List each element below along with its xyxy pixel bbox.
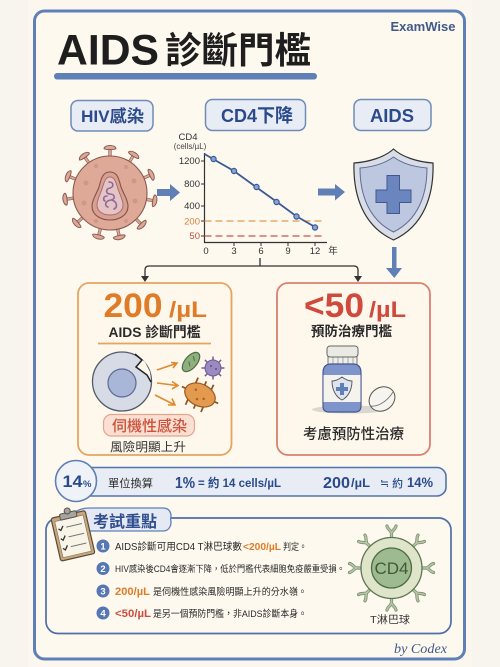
item 4: 是另一個預防門檻，非AIDS診斷本身。	[153, 608, 307, 620]
signature: by Codex	[394, 642, 448, 657]
title	[54, 26, 317, 80]
panel: <50/µL	[277, 283, 430, 455]
value <50/µL: <50	[304, 287, 364, 325]
chart: CD4 decline: 6	[258, 246, 264, 257]
chart: CD4 decline: 800	[184, 179, 200, 190]
panel: 200/µL	[78, 283, 232, 455]
icon: CD4 T cell: CD4	[374, 559, 409, 578]
conversion bar: /µL	[351, 478, 370, 490]
conversion bar: = 約 14 cells/µL	[198, 475, 281, 490]
chart: CD4 decline: 0	[203, 246, 209, 257]
conversion bar: 14%	[407, 474, 434, 490]
item 1: 判定。	[283, 541, 307, 553]
step: HIV感染: HIV感染	[81, 106, 144, 126]
step: HIV感染	[71, 100, 153, 131]
icon: clipboard	[49, 504, 95, 561]
caption: 風險明顯上升: 風險明顯上升	[110, 439, 186, 454]
badge: 伺機性感染: 伺機性感染	[112, 417, 187, 435]
step: AIDS: AIDS	[370, 105, 414, 126]
chart: CD4 decline	[174, 132, 338, 257]
value 200/µL: /µL	[169, 297, 207, 322]
arrow: AIDS down	[386, 247, 402, 278]
caption: T淋巴球: T淋巴球	[370, 613, 411, 626]
heading: AIDS 診斷門檻: AIDS 診斷門檻	[108, 324, 200, 340]
item 2: 2	[100, 564, 106, 575]
brand: ExamWise	[390, 19, 456, 34]
badge: 伺機性感染	[104, 414, 194, 436]
conversion bar: 1%	[175, 475, 195, 492]
item 1: <200/µL	[243, 542, 281, 553]
connector: branching arrows	[141, 258, 362, 282]
item 3: 200/µL	[115, 586, 150, 598]
conversion bar: 14	[62, 472, 83, 491]
chart: CD4 decline: 12	[310, 246, 320, 257]
panel: exam key points	[46, 504, 451, 634]
chart: CD4 decline: (cells/µL)	[174, 142, 207, 151]
chart: CD4 decline: CD4	[178, 132, 198, 143]
chart: CD4 decline: 9	[285, 246, 291, 257]
value <50/µL	[304, 287, 406, 325]
item 1: 1	[100, 542, 106, 552]
arrow: CD4 to AIDS	[318, 184, 345, 200]
item 1	[96, 540, 307, 553]
item 2: HIV感染後CD4會逐漸下降，低於門檻代表細胞免疫嚴重受損。	[115, 563, 345, 574]
icon: CD4 T cell	[350, 526, 434, 610]
value 200/µL	[104, 287, 207, 325]
chart: CD4 decline: 1200	[179, 156, 200, 167]
chart: CD4 decline: 50	[189, 231, 200, 242]
chart: CD4 decline: 200	[184, 216, 200, 228]
item 4: 4	[100, 608, 106, 620]
chart: CD4 decline: 3	[231, 246, 237, 257]
step: CD4下降	[206, 100, 306, 130]
item 1: AIDS診斷可用CD4 T淋巴球數	[115, 540, 242, 553]
step: CD4下降: CD4下降	[221, 105, 293, 126]
item 3: 是伺機性感染風險明顯上升的分水嶺。	[153, 586, 307, 598]
value <50/µL: /µL	[369, 297, 406, 322]
item 4	[96, 606, 307, 620]
chart: CD4 decline: 400	[184, 201, 200, 212]
step: AIDS	[354, 100, 431, 130]
heading tab: 考試重點	[70, 508, 171, 531]
chart: CD4 decline: 年	[328, 245, 338, 257]
heading: 預防治療門檻: 預防治療門檻	[311, 323, 392, 339]
conversion bar: ≒ 約	[380, 476, 403, 490]
caption: 考慮預防性治療: 考慮預防性治療	[303, 426, 404, 443]
conversion bar: 單位換算	[108, 476, 153, 490]
icon: pathogens and arrows	[155, 349, 224, 417]
icon: medicine bottle and pill	[312, 346, 400, 416]
conversion bar: %	[83, 479, 92, 490]
icon: HIV virus	[62, 146, 158, 241]
conversion bar: 200	[323, 475, 350, 492]
item 2	[96, 562, 345, 575]
title: AIDS	[57, 26, 159, 74]
heading tab: 考試重點: 考試重點	[93, 512, 157, 531]
item 3	[96, 584, 307, 598]
item 4: <50/µL	[115, 608, 151, 620]
arrow: HIV to CD4	[157, 184, 180, 201]
icon: shield	[354, 149, 433, 240]
title: 診斷門檻	[165, 30, 311, 71]
conversion bar	[56, 460, 446, 502]
value 200/µL: 200	[104, 287, 162, 325]
item 3: 3	[100, 586, 106, 598]
icon: damaged cell	[92, 352, 152, 411]
